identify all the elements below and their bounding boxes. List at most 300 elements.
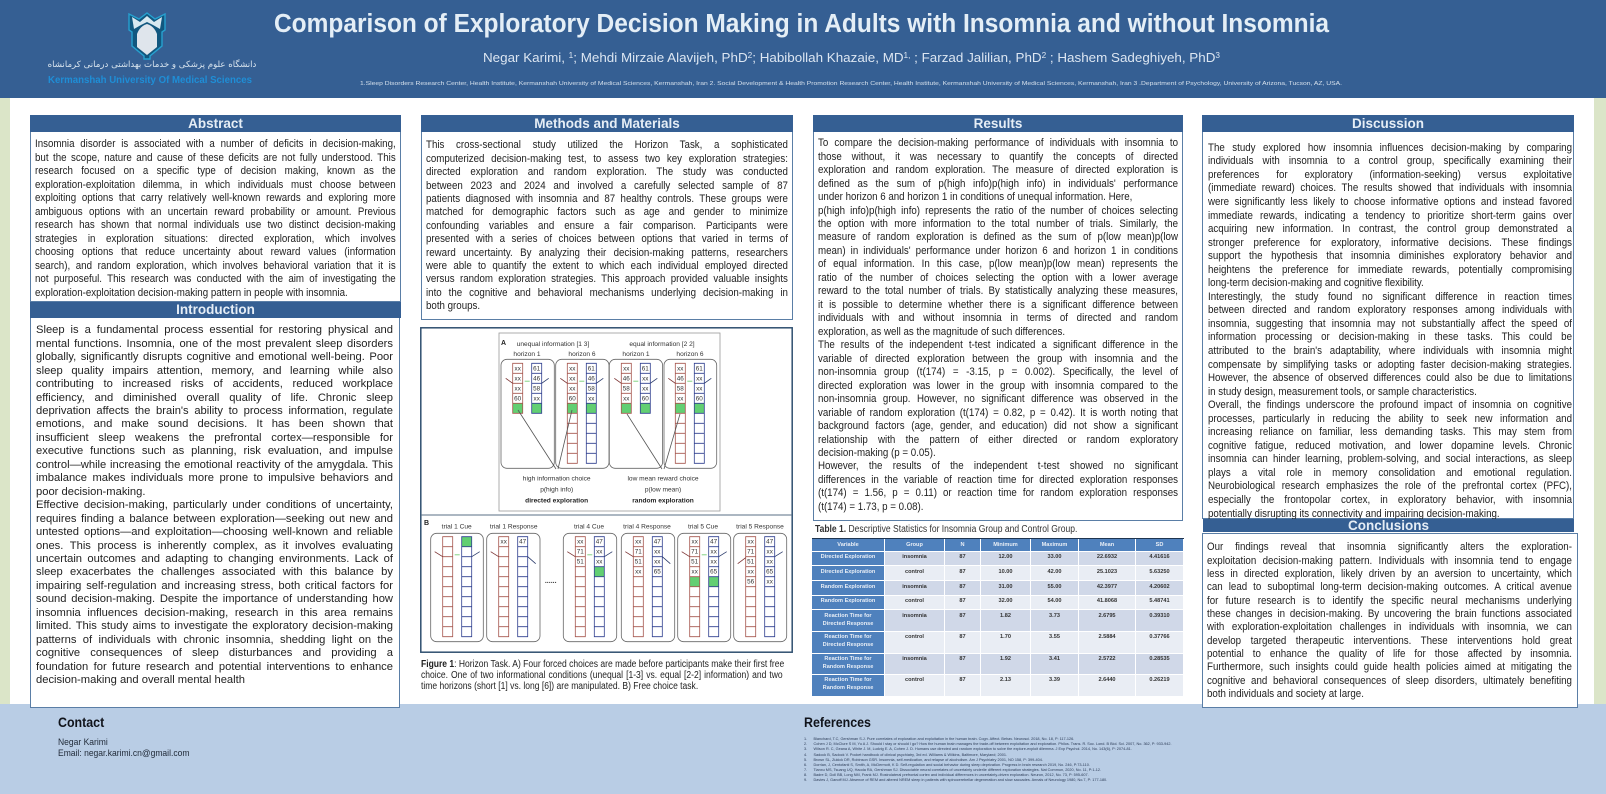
B: trial 4 cue: 47 [596, 539, 603, 546]
statistics table: insomnia [902, 554, 927, 560]
statistics table: 5.48741 [1149, 598, 1170, 604]
statistics table: 31.00 [998, 584, 1012, 590]
discussion text: potentially disrupting its connectivity and impairing decision-making. [1208, 508, 1500, 520]
B: trial 4 cue [567, 537, 612, 637]
panel: abstract [30, 115, 401, 302]
reference list: 1. Blanchard, T.C, Gershman S.J. Pure correlates of exploration and exploitation in the human brain. Cogn. Affect. Behav. Neurosci. 2018, No. 18, P: 117-126. [804, 736, 1074, 740]
statistics table: 3.39 [1049, 677, 1060, 683]
methods text: were able to quantify the extent to which each individual employed directed [426, 260, 787, 272]
A: unequal horizon 1: 61 [533, 365, 541, 372]
conclusions heading: Conclusions [1348, 518, 1429, 533]
A: unequal horizon 6: xx [569, 365, 576, 372]
figure part B: ...... [545, 578, 557, 585]
panel: discussion [1202, 115, 1574, 519]
statistics table: Maximum [1042, 542, 1067, 548]
references block [804, 715, 1172, 782]
contact details: Negar Karimi [58, 736, 108, 747]
affiliations: 1.Sleep Disorders Research Center, Health Institute, Kermanshah University of Medical Sciences, Kermanshah, Iran 2. Social Development & Health Promotion Research Center, Health Institute, Kermanshah University of Medical Sciences, Kermanshah, Iran 3 .Department of Psychology, University of Arizona, Tucson, AZ, USA. [360, 81, 1343, 87]
introduction text: insomnia influences decision-making, research in this area remains [36, 607, 393, 619]
results text: under horizon 6 and horizon 1 in conditions of unequal information. Here, [818, 191, 1132, 203]
introduction text: uncertain outcomes and adapting to changing environments. Lack of [36, 553, 393, 565]
A: unequal horizon 1: 58 [533, 385, 541, 392]
statistics table: control [905, 634, 924, 640]
statistics table: 2.13 [1000, 677, 1011, 683]
statistics table: 0.26219 [1149, 677, 1170, 683]
B: trial 5 response: 56 [747, 579, 755, 586]
figure part B: trial 4 Cue [574, 524, 604, 530]
statistics table: control [905, 677, 924, 683]
abstract text: choosing options that reduce uncertainty about reward values (information [35, 246, 396, 258]
side strips background [0, 98, 1606, 704]
A: unequal horizon 6: xx [569, 375, 576, 382]
abstract text: research focused on a specific type of decision making, known as the [35, 165, 396, 177]
figure part B: trial 1 Response [490, 524, 538, 530]
methods text: both groups. [426, 300, 480, 312]
methods text: directed exploration and random exploration. The study was conducted [426, 166, 787, 178]
statistics table: 5.63250 [1149, 569, 1170, 575]
reference list [804, 736, 1172, 782]
introduction text: foundation for future research and potential interventions to enhance [36, 661, 393, 673]
conclusions text box: both individuals and society at large. [1207, 688, 1364, 700]
logo: university emblem [128, 12, 166, 60]
results heading: Results [974, 116, 1022, 131]
A: unequal horizon 1: 60 [514, 395, 522, 402]
figure part A: horizon 1 [622, 351, 650, 358]
A: unequal horizon 6 [560, 363, 603, 463]
methods text: into the cognitive and behavioral mechanisms underlying decision-making in [426, 287, 787, 299]
statistics table: Random Exploration [821, 598, 875, 604]
conclusions text box: can lead to suboptimal long-term decision-making outcomes. A critical avenue [1207, 581, 1572, 593]
A: equal horizon 1 [614, 363, 657, 413]
discussion text [1208, 142, 1572, 520]
A: equal horizon 1: 61 [642, 365, 649, 372]
discussion text: were significantly less likely to choose informative options and instead favored [1208, 196, 1572, 208]
statistics table: Reaction Time for [824, 634, 872, 640]
statistics table: 32.00 [998, 598, 1012, 604]
statistics table: 1.82 [1000, 613, 1011, 619]
discussion text: (immediate reward) choices. The results showed that individuals with insomnia [1208, 182, 1572, 194]
B: trial 5 response: xx [767, 579, 774, 586]
discussion text: plays a vital role in memory consolidation and emotional regulation. [1208, 467, 1572, 479]
figure part B: trial 1 Cue [442, 524, 472, 530]
figure caption: Figure 1: Horizon Task. A) Four forced choices are made before participants make their first free [421, 659, 784, 670]
B: trial 4 cue: xx [577, 539, 584, 546]
A: unequal horizon 6: 61 [588, 365, 595, 372]
A: equal horizon 1: xx [642, 375, 649, 382]
introduction text: limited. This study aims to investigate the exploratory decision-making [36, 620, 393, 632]
B: trial 1 response: xx [501, 539, 508, 546]
abstract text: not purposeful. This research was conducted with the aim of investigating the [35, 273, 396, 285]
statistics table: 42.3977 [1097, 584, 1117, 590]
results text: ratio of the number of choices selecting the option with a lower average [818, 272, 1178, 284]
B: trial 5 cue: xx [692, 539, 699, 546]
statistics table: 87 [959, 634, 966, 640]
B: trial 4 cue: xx [596, 559, 603, 566]
introduction text: executive functions such as planning, risk evaluation, and impulse [36, 445, 393, 457]
results text: To compare the decision-making performance of individuals with insomnia to [818, 137, 1178, 149]
A: equal horizon 6: xx [677, 365, 684, 372]
logo: English university name: Kermanshah University Of Medical Sciences [48, 75, 252, 86]
introduction text: poor decision-making. [36, 486, 145, 498]
discussion text: increasing reliance on familiar, less demanding tasks. This may stem from [1208, 426, 1572, 438]
A: arrows to choices [518, 410, 680, 469]
A: unequal horizon 1: xx [515, 365, 522, 372]
A: random exploration caption [627, 476, 699, 504]
discussion text: between directed and random exploratory responses among individuals with [1208, 304, 1572, 316]
reference list: 2. Cohen J D, McClure S M, Yu A J. Should I stay or should I go? How the human brain manages the trade-off between exploitation and exploration. Philos. Trans. R. Soc. Lond. B Biol. Sci. 2007, No. 362, P: 933-942. [804, 742, 1172, 746]
B: trial 5 cue: 65 [710, 569, 718, 576]
figure part A: horizon 1 [513, 351, 541, 358]
results text: background factors (age, gender, and education) did not show a significant [818, 420, 1178, 432]
results text: (t(174) = 1.73, p = 0.08). [818, 501, 924, 513]
statistics table: 12.00 [998, 554, 1012, 560]
discussion text: Overall, the findings underscore the profound impact of insomnia on cognitive [1208, 399, 1572, 411]
introduction text: ones. This process is inherently complex, as it involves evaluating [36, 540, 393, 552]
statistics table: 1.70 [1000, 634, 1011, 640]
statistics table: control [905, 598, 924, 604]
A: random exploration caption: p(low mean) [645, 486, 681, 494]
statistics table: Minimum [993, 542, 1018, 548]
B: trial 4 response: xx [635, 539, 642, 546]
introduction text: emotions, and make sound decisions. It has been shown that [36, 418, 393, 430]
A: equal horizon 1: xx [623, 365, 630, 372]
results text: The results of the independent t-test indicated a significant difference in the [818, 339, 1178, 351]
B: trial 5 cue: 51 [691, 559, 699, 566]
discussion text: preferences for exploratory (information-seeking) versus exploitative [1208, 169, 1572, 181]
discussion text: immediate rewards, indicating a tendency to prioritize short-term gains over [1208, 210, 1572, 222]
methods text: between 2023 and 2024 and involved a carefully selected sample of 87 [426, 180, 787, 192]
conclusions text box: Furthermore, such insights could guide health policies aimed at mitigating the [1207, 661, 1572, 673]
results text: non-insomnia group (t(174) = -3.15, p = 0.002). Specifically, the level of [818, 366, 1178, 378]
results text: relationship with the pattern of either directed or random exploratory [818, 434, 1178, 446]
contact block [58, 715, 189, 758]
results text: However, the results of the independent t-test showed no significant [818, 460, 1178, 472]
authors [483, 50, 1221, 65]
introduction heading: Introduction [176, 302, 255, 317]
statistics table: Random Exploration [821, 584, 875, 590]
A: equal horizon 1: xx [623, 395, 630, 402]
methods text: This cross-sectional study utilized the Horizon Task, a sophisticated [426, 139, 787, 151]
B: trial 5 cue [682, 537, 727, 637]
statistics table: 87 [959, 569, 966, 575]
figure part A: equal information [2 2] [629, 341, 695, 348]
A: unequal horizon 1: xx [515, 385, 522, 392]
reference list: 3. Wilson R. C, Geana A, White J. M, Ludvig E. A, Cohen J. D. Humans use directed and random exploration to solve the explore-exploit dilemma. J Exp Psychol. 2014, No. 143(6), P: 2074-81. [804, 746, 1132, 750]
discussion text: insomnia can hinder learning, problem-solving, and social interactions, as sleep [1208, 453, 1572, 465]
statistics table: 3.55 [1049, 634, 1060, 640]
statistics table: 3.41 [1049, 656, 1060, 662]
introduction text: sound decision-making. Despite the importance of understanding how [36, 593, 393, 605]
A: unequal horizon 1 [506, 363, 549, 413]
A: unequal horizon 6: 60 [569, 395, 576, 402]
figure part A: horizon 6 [568, 351, 596, 358]
conclusions text box: Our findings reveal that insomnia significantly alters the exploration- [1207, 541, 1572, 553]
conclusions text box: potential to enhance the quality of life for those affected by insomnia. [1207, 648, 1572, 660]
results text: mean) in individuals' performance under horizon 6 and horizon 1 in conditions [818, 245, 1178, 257]
statistics table: 54.00 [1048, 598, 1062, 604]
discussion text: cognitive fatigue, reduced motivation, and lower dopamine levels. Chronic [1208, 440, 1572, 452]
B: trial 4 response: 47 [654, 539, 661, 546]
figure part A: horizon 6 [676, 351, 704, 358]
logo: Persian university name: دانشگاه علوم پزشکی و خدمات بهداشتی درمانی کرمانشاه [48, 60, 256, 70]
abstract text: ambiguous options with an uncertain reward probability or amount. Previous [35, 206, 396, 218]
B: trial 1 response [491, 537, 536, 637]
B: trial 1 response: 47 [519, 539, 527, 546]
results text: non-insomnia group. However, no significant difference was observed in the [818, 393, 1178, 405]
authors: 2 [748, 51, 753, 60]
figure caption: choice. One of two informational conditions (unequal [1-3] vs. equal [2-2] information) and two [421, 670, 783, 681]
B: trial 5 response: 47 [766, 539, 774, 546]
reference list: 8. Badre D, Doll BB, Long NM, Frank MJ. Rostrolateral prefrontal cortex and individual differences in uncertainty-driven exploration. Neuron, 2012, No. 73, P: 595-607. [804, 773, 1089, 777]
figure part B: trial 5 Response [736, 524, 784, 530]
results text: those without, it was necessary to quantify the concepts of directed [818, 151, 1178, 163]
A: equal horizon 6: 60 [696, 395, 703, 402]
abstract text: exploration-exploitation decision-making pattern in people with insomnia. [35, 286, 348, 298]
abstract text: search), and random exploration, which involves behavioral variation that it is [35, 260, 396, 272]
conclusions text box: with exploration-exploitation challenges in individuals with insomnia, we can [1207, 621, 1572, 633]
A: equal horizon 6: 61 [696, 365, 703, 372]
figure caption: time horizons (short [1] vs. long [6]) are manipulated. B) Free choice task. [421, 681, 698, 692]
conclusions heading [1203, 519, 1574, 532]
B: trial 4 cue: xx [596, 549, 603, 556]
figure: horizon task diagram [420, 327, 793, 653]
B: trial 5 response: xx [748, 569, 755, 576]
statistics table: Directed Response [823, 621, 873, 627]
reference list: 7. Tianxu MS, Tsuang UQ, Haoda RA, Gershman SJ. Dissociable neural correlates of uncertainty underlie different exploration strategies. Nat Commun, 2020, No. 11, P:1-12. [804, 768, 1101, 772]
figure part B: trial 4 Response [623, 524, 671, 530]
statistics table: 42.00 [1048, 569, 1062, 575]
results text [818, 137, 1178, 513]
B: trial 5 response: 51 [747, 559, 755, 566]
introduction text: requires finding a balance between exploration—seeking out new and [36, 513, 393, 525]
abstract text: exploiting options that carry relatively well-known rewards and exploring more [35, 192, 396, 204]
statistics table: 22.6932 [1097, 554, 1117, 560]
A: random exploration caption: random exploration [632, 498, 694, 504]
authors: 1, [904, 51, 910, 60]
table 1: descriptive statistics [812, 524, 1184, 696]
results heading [813, 115, 1183, 132]
methods text: versus random exploration strategies. This approach provided valuable insights [426, 273, 787, 285]
A: unequal horizon 1: 46 [533, 375, 541, 382]
methods text: confounding variables and ensure a fair comparison. Participants were [426, 220, 787, 232]
results text: differences in the variable of reaction time for directed exploration responses [818, 474, 1178, 486]
A: unequal horizon 6: 58 [588, 385, 595, 392]
statistics table: Directed Response [823, 642, 873, 648]
statistics table: Reaction Time for [824, 677, 872, 683]
discussion text: Neurobiological research emphasizes the role of the prefrontal cortex (PFC), [1208, 480, 1572, 492]
statistics table: 4.20602 [1149, 584, 1170, 590]
B: trial 4 response: xx [654, 559, 661, 566]
methods text: patients diagnosed with insomnia and 87 healthy controls. These groups were [426, 193, 787, 205]
statistics table: 2.6440 [1098, 677, 1116, 683]
statistics table: 87 [959, 677, 966, 683]
abstract text: Insomnia disorder is associated with a number of deficits in decision-making, [35, 138, 396, 150]
statistics table: insomnia [902, 613, 927, 619]
introduction text: deprivation affects the brain's ability to process information, regulate [36, 405, 393, 417]
results text: reward to the total number of trials. By statistically analyzing these measures, [818, 285, 1178, 297]
B: trial 4 cue: 71 [577, 549, 584, 556]
statistics table: 4.41616 [1149, 554, 1170, 560]
results text: defined as the sum of p(high info)p(high info) in individuals' performance [818, 178, 1178, 190]
abstract text: strategies in exploration situations: directed exploration, which involves [35, 232, 396, 244]
statistics table: 0.37766 [1149, 634, 1170, 640]
discussion text: support the hypothesis that insomnia diminishes exploratory behavior and [1208, 250, 1572, 262]
reference list: 9. Davies J, Ganoff MJ. Absence of REM and altered NREM sleep in patients with spinocerebellar degeneration and slow saccades. Annals of Neurology 1980, No.7, P: 177-180. [804, 778, 1107, 782]
statistics table: 1.92 [1000, 656, 1011, 662]
introduction text: contributing to increased risks of accidents, reduced workplace [36, 378, 393, 390]
introduction text: untested options—and exploitation—choosing well-known and reliable [36, 526, 393, 538]
statistics table: 33.00 [1048, 554, 1062, 560]
statistics table: Reaction Time for [824, 613, 872, 619]
discussion text: individuals with insomnia to a control group, specifically examining their [1208, 155, 1572, 167]
discussion text: compensate by simplifying tasks or adopting faster decision-making strategies. [1208, 359, 1572, 371]
introduction text: Effective decision-making, particularly under conditions of uncertainty, [36, 499, 393, 511]
figure part A: A [501, 340, 506, 347]
discussion text: acquiring new information. In contrast, the control group demonstrated a [1208, 223, 1572, 235]
authors: 1 [569, 51, 574, 60]
reference list: 4. Sadock B, Sadock V. Pocket handbook of clinical psychiatry, 3rd ed. Williams & Wilkins, Baltimore, Maryland; 2001. [804, 753, 1007, 757]
A: unequal horizon 6: xx [569, 385, 576, 392]
introduction text: sleep exacerbates the challenges associated with this balance by [36, 566, 393, 578]
B: trial 4 response [625, 537, 670, 637]
authors: 2 [1042, 51, 1047, 60]
contact details: Email: negar.karimi.cn@gmail.com [58, 747, 189, 758]
statistics table: Mean [1100, 542, 1114, 548]
introduction text: globally, significantly disrupts cognitive and emotional well-being. Poor [36, 351, 393, 363]
footer band [0, 704, 1606, 794]
results text: exploration and random exploration. The measure of directed exploration is [818, 164, 1178, 176]
discussion heading [1202, 115, 1574, 132]
discussion text: However, the absence of observed differences could also be due to limitations [1208, 372, 1572, 384]
discussion heading: Discussion [1352, 116, 1424, 131]
statistics table: insomnia [902, 584, 927, 590]
results text: measure of random exploration is defined as the sum of p(low mean)p(low [818, 231, 1178, 243]
authors: ; Hashem Sadeghiyeh, PhD [1046, 50, 1215, 65]
conclusions text box: cognitive and behavioral consequences of sleep disorders, ultimately benefiting [1207, 675, 1572, 687]
authors: ; Farzad Jalilian, PhD [910, 50, 1042, 65]
introduction heading [30, 302, 401, 318]
introduction text: decision-making and overall mental health [36, 674, 245, 686]
methods text: presented with a series of choices between options that varied in terms of [426, 233, 787, 245]
A: directed exploration caption: high information choice [523, 476, 591, 482]
discussion text: attributed to the brain's adaptability, where individuals with insomnia might [1208, 345, 1572, 357]
results text: the option with more information to the total number of trials. Similarly, the [818, 218, 1178, 230]
introduction text: efficiency, and diminished overall quality of life. Chronic sleep [36, 392, 393, 404]
statistics table: 87 [959, 584, 966, 590]
B: trial 4 response: xx [635, 569, 642, 576]
statistics table: control [905, 569, 924, 575]
contact heading: Contact [58, 715, 104, 730]
A: random exploration caption: low mean reward choice [627, 476, 699, 482]
A: equal horizon 1: 46 [623, 375, 630, 382]
discussion text: insomnia, suggesting that insomnia may not substantially affect the speed of [1208, 318, 1572, 330]
panel: conclusions [1202, 518, 1578, 708]
statistics table: Directed Exploration [821, 569, 875, 575]
introduction text: mental functions. Insomnia, one of the most prevalent sleep disorders [36, 338, 393, 350]
B: trial 4 response: 65 [654, 569, 661, 576]
results text: variable of directed exploration between the group with insomnia and the [818, 353, 1178, 365]
discussion text: processes, particularly in reducing the ability to seek new information and [1208, 413, 1572, 425]
A: directed exploration caption [523, 476, 591, 504]
figure caption [421, 659, 784, 692]
B: trial 4 cue: 51 [577, 559, 584, 566]
A: equal horizon 6: xx [696, 375, 703, 382]
A: equal horizon 6: xx [677, 395, 684, 402]
statistics table: 10.00 [998, 569, 1012, 575]
B: trial 5 response: xx [748, 539, 755, 546]
discussion text: heightens the preference for immediate rewards, potentially compromising [1208, 264, 1572, 276]
methods text: computerized decision-making test, to assess two key exploration strategies: [426, 153, 787, 165]
discussion text: especially the frontopolar cortex, in exploratory behavior, with insomnia [1208, 494, 1572, 506]
statistics table: 87 [959, 613, 966, 619]
statistics table: Random Response [823, 664, 873, 670]
statistics table: 2.5722 [1098, 656, 1116, 662]
results text: exploration, as well as the magnitude of such differences. [818, 326, 1065, 338]
A: equal horizon 6: 46 [677, 375, 684, 382]
statistics table: Directed Exploration [821, 554, 875, 560]
results text: individuals with and without insomnia in terms of directed and random [818, 312, 1178, 324]
statistics table: insomnia [902, 656, 927, 662]
discussion text: Interestingly, the study found no significant difference in reaction times [1208, 291, 1572, 303]
introduction text: imbalance makes individuals more prone to impulsive behaviors and [36, 472, 393, 484]
A: equal horizon 1: 60 [642, 395, 649, 402]
statistics table [812, 538, 1184, 697]
discussion text: The study explored how insomnia influences decision-making by comparing [1208, 142, 1572, 154]
conclusions text box: for future research is to identify the specific neural mechanisms underlying [1207, 595, 1572, 607]
statistics table: Random Response [823, 685, 873, 691]
panel: results [813, 115, 1183, 521]
discussion text: in study design, measurement tools, or sample characteristics. [1208, 386, 1477, 398]
statistics table: SD [1156, 542, 1163, 548]
table caption: Table 1. Descriptive Statistics for Insomnia Group and Control Group. [815, 524, 1077, 535]
conclusions text box: less in directed exploration, likely driven by an aversion to uncertainty, which [1207, 568, 1572, 580]
results text: directed exploration was lower in the group with insomnia compared to the [818, 380, 1178, 392]
abstract text [35, 138, 396, 298]
B: trial 5 cue: xx [711, 559, 718, 566]
abstract heading: Abstract [188, 116, 243, 131]
methods text: reward uncertainty. By analyzing their decision-making patterns, researchers [426, 247, 787, 259]
abstract text: research has shown that normal individuals use two distinct decision-making [35, 219, 396, 231]
figure part B [424, 520, 787, 642]
discussion text: long-term decision-making and cognitive flexibility. [1208, 277, 1424, 289]
B: trial 5 cue: 71 [691, 549, 699, 556]
statistics table: 0.39310 [1149, 613, 1170, 619]
header banner [0, 0, 1606, 98]
panel: methods and materials [421, 115, 793, 320]
statistics table: 25.1023 [1097, 569, 1117, 575]
reference list: 6. Dorrian, J, Centofanti S, Smith, A, McDermott, K D. Self-regulation and social behavior during sleep deprivation. Progress in brain research 2019, No. 246, P:73-110. [804, 763, 1090, 767]
statistics table: Variable [837, 542, 859, 548]
results text: decision-making (p = 0.05). [818, 447, 936, 459]
introduction text: insufficient sleep weakens the prefrontal cortex—responsible for [36, 432, 393, 444]
results text: of equal information. In this case, p(low mean)p(low mean) represents the [818, 258, 1178, 270]
B: trial 5 response [738, 537, 783, 637]
discussion text: stronger preference for exploratory, informative decisions. These findings [1208, 237, 1572, 249]
statistics table: 0.28535 [1149, 656, 1170, 662]
panel: introduction [30, 302, 400, 708]
authors: ; Mehdi Mirzaie Alavijeh, PhD [573, 50, 748, 65]
results text: it is possible to determine whether there is a significant difference between [818, 299, 1178, 311]
statistics table: 2.5884 [1098, 634, 1116, 640]
B: trial 5 cue: xx [711, 549, 718, 556]
B: trial 5 cue: xx [692, 569, 699, 576]
A: directed exploration caption: p(high info) [540, 486, 573, 494]
introduction text: sleep quality impairs attention, memory, and learning while also [36, 365, 393, 377]
statistics table: Reaction Time for [824, 656, 872, 662]
statistics table: 87 [959, 598, 966, 604]
A: unequal horizon 1: xx [534, 395, 541, 402]
authors: 3 [1215, 51, 1221, 60]
